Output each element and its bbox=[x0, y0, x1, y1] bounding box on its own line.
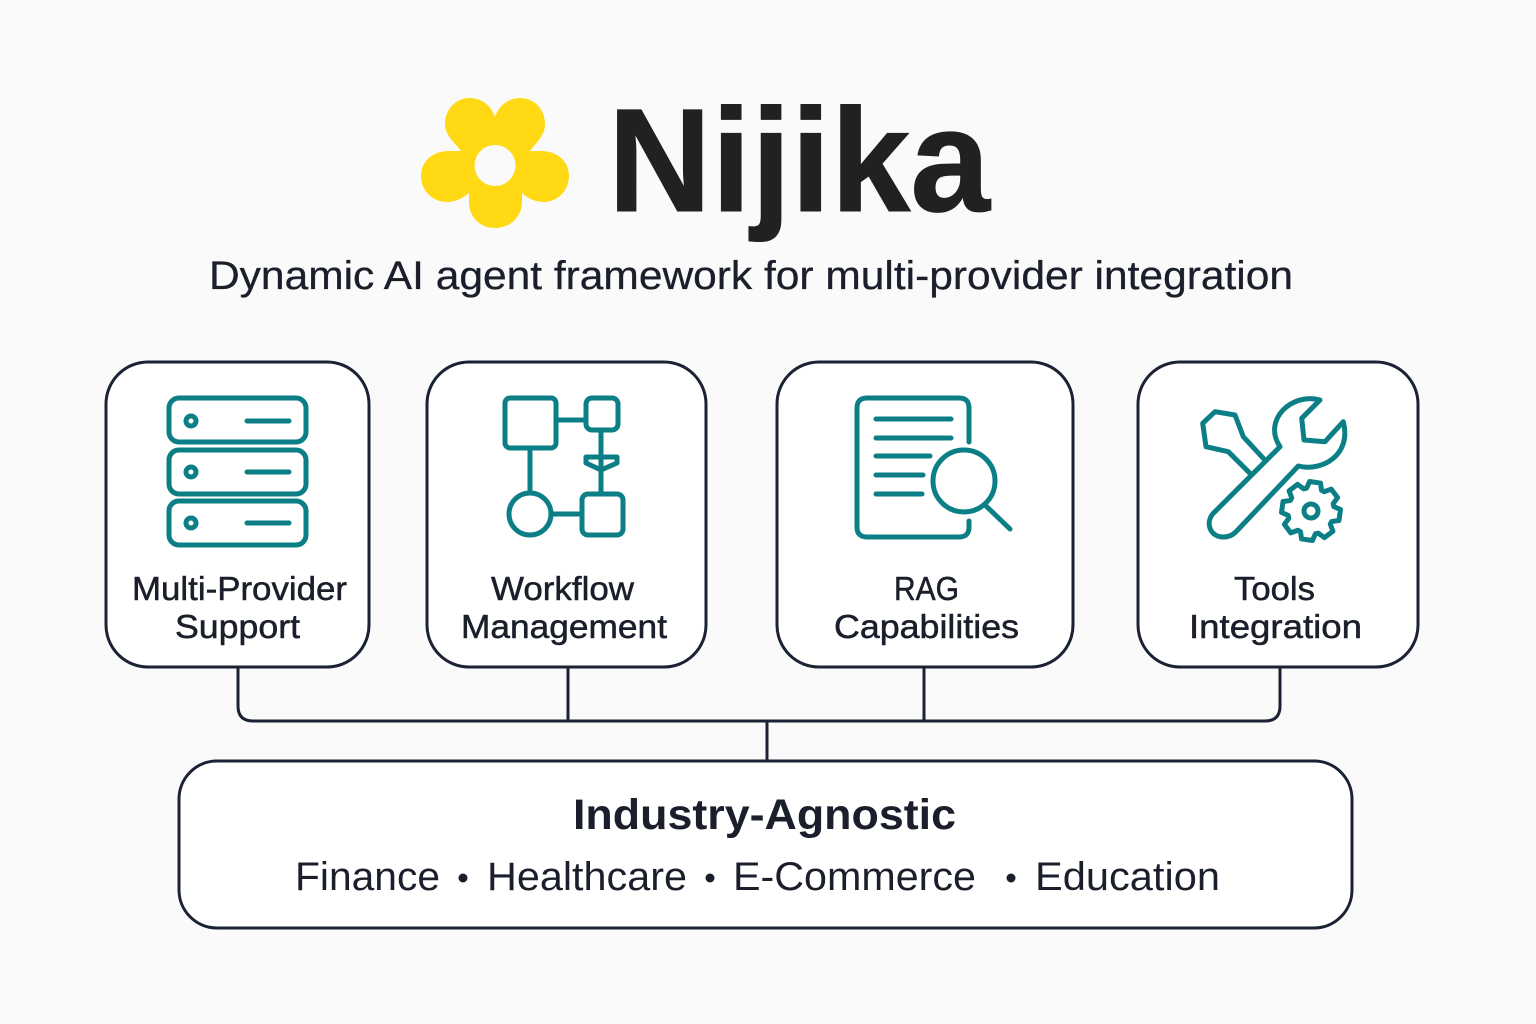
connector lines bbox=[238, 667, 1280, 761]
label: Integration bbox=[1189, 608, 1362, 645]
label bbox=[461, 570, 667, 645]
panel: Multi-Provider Support bbox=[106, 362, 369, 667]
industries list: E-Commerce bbox=[733, 855, 976, 899]
icon: server stack bbox=[169, 398, 306, 545]
label bbox=[132, 570, 347, 645]
industries list: Education bbox=[1035, 855, 1220, 899]
icon: wrench, screwdriver and gear bbox=[1203, 399, 1345, 544]
title: Nijika bbox=[608, 79, 991, 243]
industries list: Finance bbox=[295, 855, 440, 899]
panel: Tools Integration bbox=[1138, 362, 1418, 667]
label bbox=[834, 570, 1019, 645]
label: Management bbox=[461, 608, 667, 645]
panel: Workflow Management bbox=[427, 362, 706, 667]
panel: Industry-Agnostic bbox=[179, 761, 1352, 928]
heading: Industry-Agnostic bbox=[573, 791, 956, 839]
label: RAG bbox=[894, 570, 959, 607]
label bbox=[1189, 570, 1362, 645]
label: Support bbox=[175, 608, 300, 645]
icon: workflow diagram bbox=[505, 398, 623, 535]
logo: yellow flower bbox=[421, 98, 569, 228]
industries list bbox=[295, 855, 1220, 899]
label: Workflow bbox=[491, 570, 634, 607]
label: Multi-Provider bbox=[132, 570, 347, 607]
subtitle: Dynamic AI agent framework for multi-provider integration bbox=[209, 254, 1293, 298]
label: Capabilities bbox=[834, 608, 1019, 645]
industries list: Healthcare bbox=[487, 855, 687, 899]
icon: document with magnifier bbox=[857, 398, 1010, 537]
panel: RAG Capabilities bbox=[777, 362, 1073, 667]
label: Tools bbox=[1234, 570, 1315, 607]
